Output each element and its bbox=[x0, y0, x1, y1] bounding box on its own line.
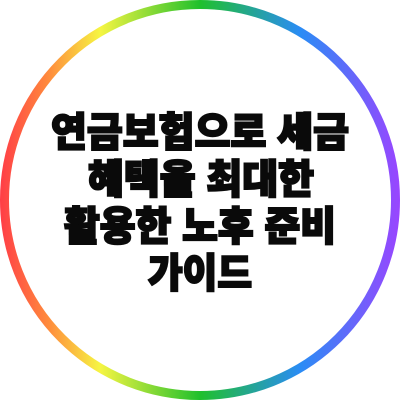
title: 혜택을 최대한 bbox=[88, 158, 314, 202]
title: 활용한 노후 준비 bbox=[64, 205, 336, 249]
title: 연금보험으로 세금 bbox=[51, 111, 349, 155]
title: 가이드 bbox=[148, 252, 252, 296]
title bbox=[51, 111, 349, 296]
